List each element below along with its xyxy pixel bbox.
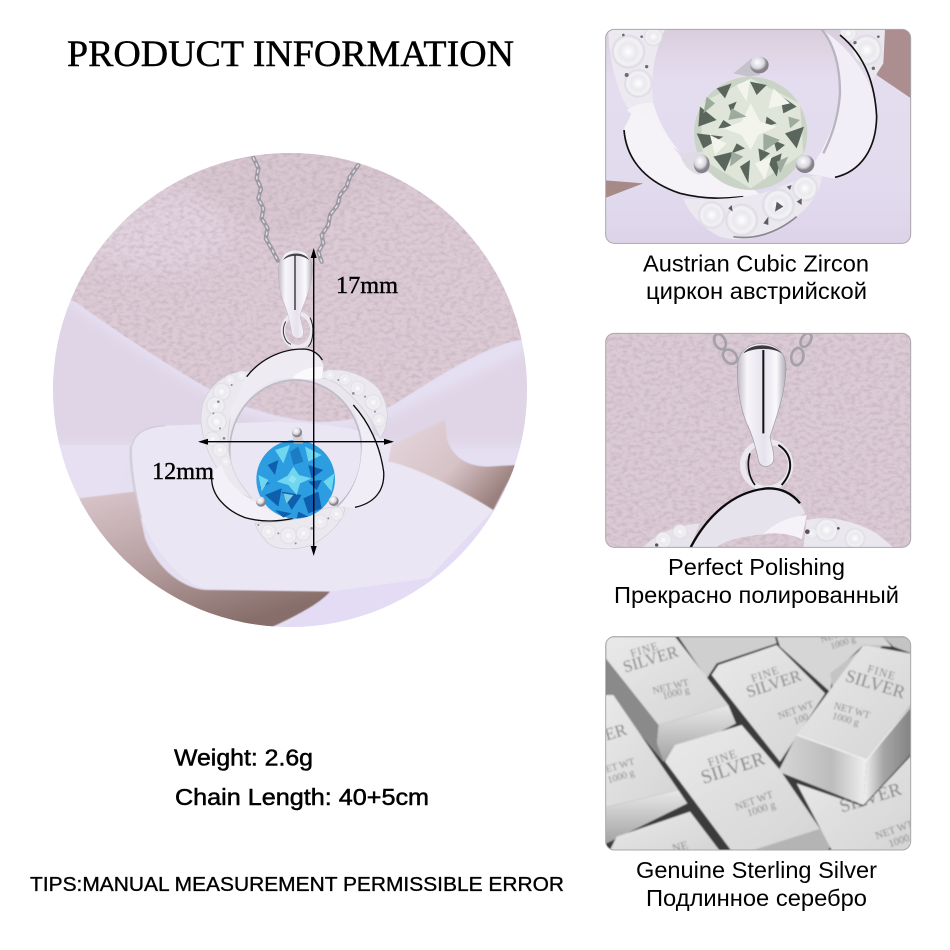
chain length spec: Chain Length: 40+5cm (175, 784, 429, 810)
ingot bottom left (610, 810, 720, 850)
ingot middle: 100 (792, 712, 810, 727)
title: PRODUCT INFORMATION (67, 34, 514, 75)
ingot lower right: 1000 g (887, 830, 919, 850)
caption: Russian polishing: Прекрасно полированный (614, 582, 899, 608)
polishing photo (606, 334, 910, 547)
height dimension arrow (311, 248, 317, 556)
panel: zircon close-up (605, 28, 912, 244)
tilted foreground ingot (778, 645, 913, 805)
icon: necklace chain (253, 158, 358, 262)
tips note: TIPS:MANUAL MEASUREMENT PERMISSIBLE ERROR (30, 873, 564, 896)
ingot middle: SILVER (744, 666, 804, 701)
ingot upper left: NET WT (651, 677, 690, 697)
ingot centre: NET WT (734, 789, 775, 813)
panel: silver bars (605, 636, 912, 850)
ingot middle: FINE (750, 664, 781, 685)
caption: Austrian Cubic Zircon: Austrian Cubic Zircon (643, 250, 869, 276)
pendant top petal (643, 487, 893, 548)
ingot lower right (796, 756, 910, 850)
panel: circular product photo with dimensions (53, 153, 527, 627)
pendant bail (737, 343, 786, 466)
ingot centre: 1000 g (746, 800, 778, 820)
ingot left: 1000 g (606, 768, 636, 786)
pendant ring (283, 314, 313, 347)
ingot centre: SILVER (698, 748, 768, 789)
ingot centre: FINE (706, 746, 739, 770)
silver bars photo (606, 637, 910, 850)
caption: Russian silver: Подлинное серебро (646, 885, 867, 911)
ingot left: ET WT (604, 756, 636, 776)
ring band with gems (201, 370, 387, 549)
weight spec: Weight: 2.6g (174, 744, 313, 770)
tilted foreground ingot: SILVER (843, 665, 908, 702)
zircon photo (606, 30, 910, 243)
width label: 12mm (152, 459, 214, 485)
prongs (256, 427, 339, 507)
tilted foreground ingot: FINE (866, 663, 897, 683)
height label: 17mm (336, 273, 398, 299)
caption: Genuine Sterling Silver: Genuine Sterling Silver (636, 857, 877, 883)
ingot upper left: FINE (629, 640, 660, 660)
top right gem band (840, 25, 885, 82)
ingot middle (712, 645, 883, 762)
polished crescents (623, 29, 877, 198)
photo backdrop (53, 153, 527, 627)
caption: Perfect Polishing: Perfect Polishing (668, 554, 845, 580)
ingot upper left: SILVER (621, 641, 681, 676)
pendant ring (743, 442, 791, 488)
ingot top back: NET WT (820, 625, 856, 646)
bottom gems (683, 176, 822, 239)
ingot upper left: 1000 g (661, 685, 691, 702)
pendant bail (278, 250, 312, 338)
icon: pendant (201, 250, 387, 549)
tilted foreground ingot: 1000 g (831, 711, 860, 729)
ingot upper left (606, 637, 736, 762)
polished petals (212, 349, 384, 521)
panel border (606, 29, 911, 243)
ingot top back: 1000 g (830, 635, 857, 652)
caption: Russian zircon: циркон австрийской (646, 278, 867, 304)
panel: polishing close-up (600, 330, 920, 557)
ingot lower right: SILVER (837, 779, 904, 817)
icon: chain links (712, 331, 814, 367)
panel border (606, 333, 911, 547)
icon: clear zircon stone (694, 77, 807, 190)
prongs (680, 57, 814, 175)
panel border (606, 637, 911, 850)
ingot bottom left: NE (670, 838, 690, 856)
ingot left: ER (602, 720, 629, 744)
ingot top back (678, 637, 910, 692)
ingot centre (665, 725, 832, 853)
left gem band (608, 27, 680, 152)
tilted foreground ingot: NET WT (833, 701, 871, 721)
ingot middle: NET WT (777, 699, 815, 722)
width dimension arrow (198, 439, 394, 445)
icon: blue gemstone (256, 440, 335, 519)
ingot lower right: NET WT (874, 819, 916, 842)
ingot left (600, 695, 687, 843)
